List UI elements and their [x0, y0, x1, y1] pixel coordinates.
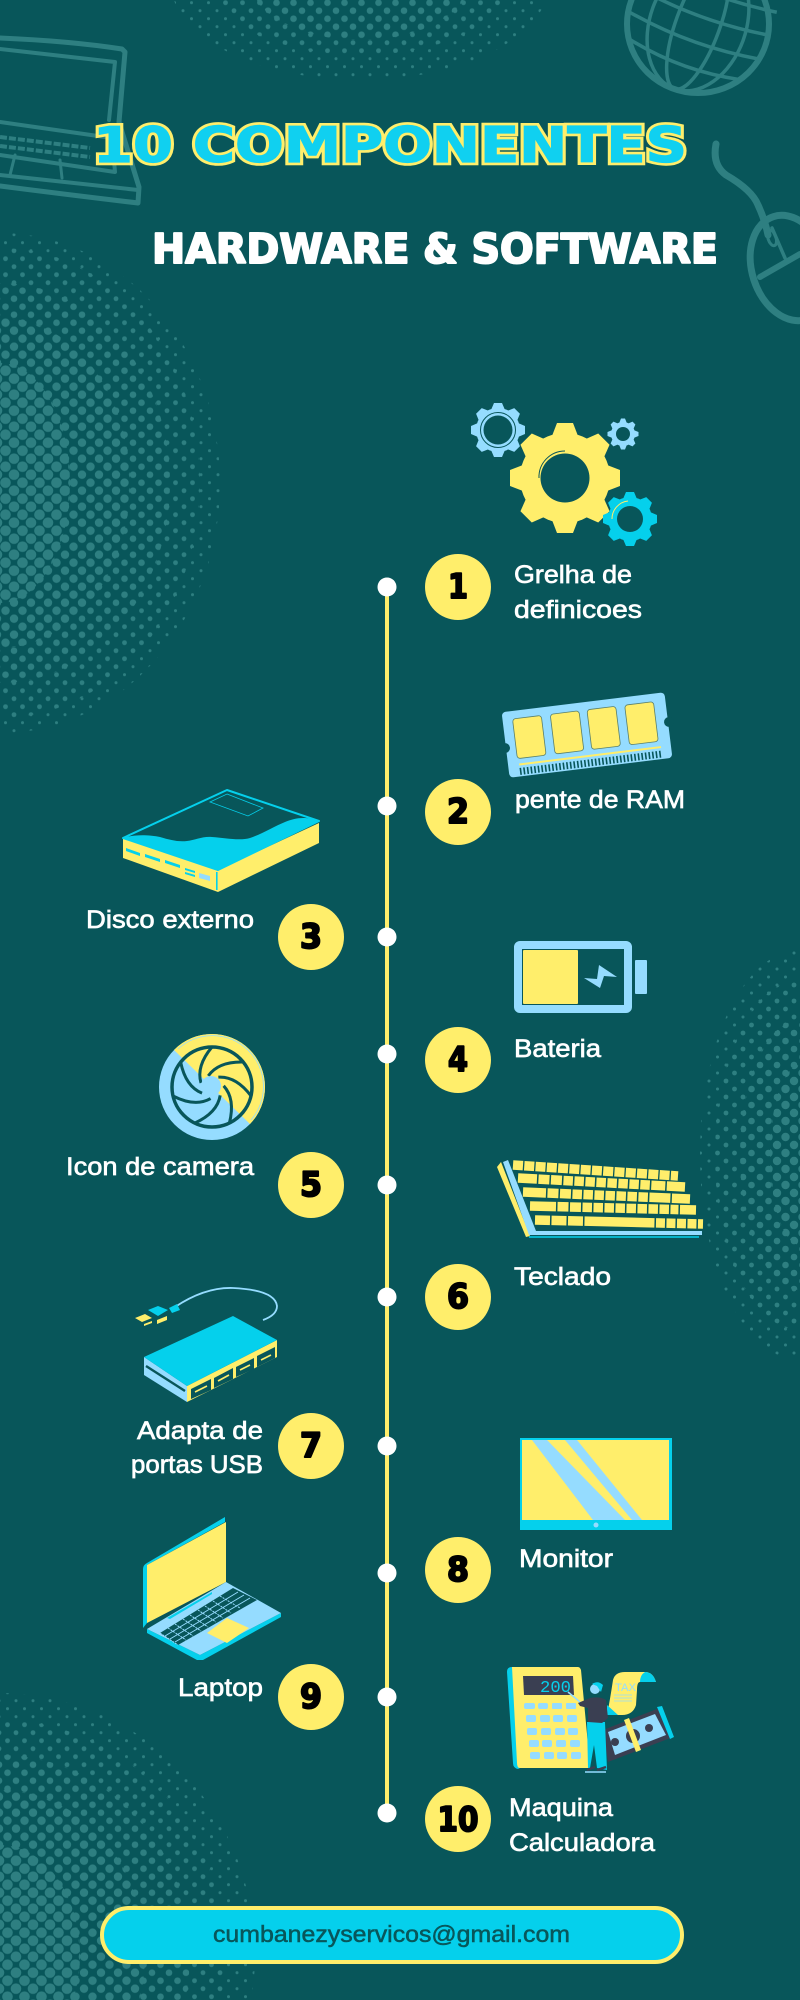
number 7 — [278, 1413, 344, 1479]
number 1: 1 — [448, 567, 468, 607]
number 7: 7 — [300, 1426, 322, 1466]
label 3: Disco externo — [86, 906, 254, 934]
label 9: Laptop — [178, 1674, 263, 1702]
title: 10 COMPONENTES — [93, 117, 687, 174]
label 8: Monitor — [519, 1545, 613, 1573]
label 6: Teclado — [514, 1263, 611, 1291]
background icon: mouse outline — [715, 144, 800, 331]
halftone: bottom left — [0, 1693, 255, 2000]
icon: RAM — [496, 692, 678, 778]
label 10 — [509, 1794, 655, 1857]
number 5 — [278, 1152, 344, 1218]
icon: monitor — [520, 1438, 672, 1530]
number 6 — [425, 1264, 491, 1330]
icon: USB hub — [135, 1288, 277, 1402]
background icon: globe outline — [607, 0, 789, 113]
icon: external disk — [123, 790, 319, 892]
subtitle: HARDWARE & SOFTWARE — [152, 225, 718, 273]
label 1: definicoes — [514, 596, 642, 624]
number 10: 10 — [438, 1800, 478, 1840]
label 7: Adapta de — [137, 1417, 263, 1445]
halftone: top — [174, 0, 546, 80]
label 7 — [131, 1417, 263, 1479]
icon: laptop — [143, 1517, 281, 1660]
number 3: 3 — [300, 917, 322, 957]
halftone: right — [700, 950, 800, 1360]
halftone: left — [0, 233, 220, 733]
icon: calculator with person, tax paper and money — [507, 1667, 674, 1772]
number 1 — [425, 554, 491, 620]
label 1 — [514, 561, 642, 624]
number 6: 6 — [447, 1277, 469, 1317]
timeline — [378, 578, 396, 1822]
label 4: Bateria — [514, 1035, 601, 1063]
number 5: 5 — [300, 1165, 322, 1205]
number 3 — [278, 904, 344, 970]
footer pill: contact email: cumbanezyservicos@gmail.com — [213, 1921, 570, 1947]
icon: keyboard — [497, 1160, 703, 1237]
icon: camera shutter — [159, 1034, 265, 1140]
icon: calculator with person, tax paper and money: TAX — [615, 1682, 637, 1694]
number 4: 4 — [448, 1040, 468, 1080]
label 5: Icon de camera — [66, 1153, 254, 1181]
number 2 — [425, 779, 491, 845]
number 9 — [278, 1664, 344, 1730]
footer pill: contact email — [102, 1908, 682, 1962]
number 2: 2 — [447, 792, 469, 832]
number 4 — [425, 1027, 491, 1093]
number 8 — [425, 1537, 491, 1603]
title: 10 COMPONENTES — [93, 117, 687, 174]
number 8: 8 — [447, 1550, 469, 1590]
number 9: 9 — [300, 1677, 322, 1717]
label 1: Grelha de — [514, 561, 632, 589]
label 10: Calculadora — [509, 1829, 655, 1857]
label 10: Maquina — [509, 1794, 613, 1822]
icon: battery — [518, 945, 647, 1009]
background icon: laptop outline — [0, 38, 139, 203]
label 2: pente de RAM — [515, 786, 685, 814]
number 10 — [425, 1786, 491, 1852]
label 7: portas USB — [131, 1451, 263, 1479]
icon: calculator with person, tax paper and money: 200 — [540, 1679, 571, 1698]
icon: gears — [471, 403, 657, 546]
